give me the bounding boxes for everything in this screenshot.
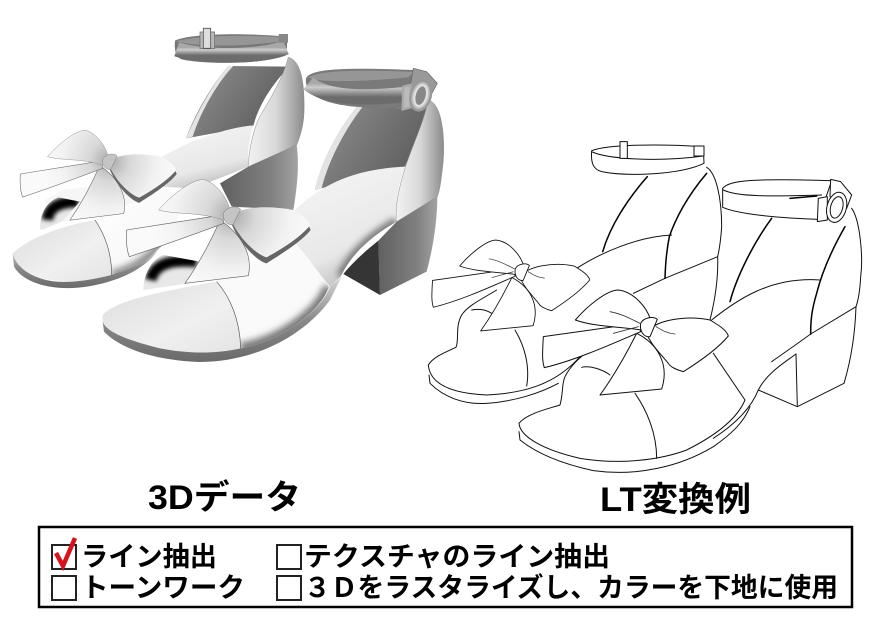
front shoe: bow	[126, 179, 311, 283]
back shoe: ankle strap	[175, 28, 288, 63]
back shoe: bow	[20, 130, 177, 220]
front shoe bow	[543, 290, 728, 395]
settings checklist panel	[39, 527, 852, 607]
unchecked box: texture line extraction: テクスチャのライン抽出	[304, 542, 610, 572]
unchecked box: tone work: トーンワーク	[81, 573, 245, 603]
front shoe: ankle strap	[306, 68, 437, 108]
3D shoes illustration	[13, 28, 444, 362]
back shoe outlines	[428, 142, 722, 404]
front shoe outlines	[519, 179, 862, 472]
heading: LT conversion example: LT変換例	[600, 481, 751, 519]
front shoe: body	[103, 100, 444, 362]
back shoe: body	[13, 57, 304, 288]
back shoe bow	[432, 240, 590, 331]
checked box: line extraction: ライン抽出	[81, 542, 217, 572]
heading: 3D data: 3Dデータ	[148, 478, 301, 517]
front shoe: buckle	[403, 79, 434, 113]
unchecked box: rasterize 3D: ３Ｄをラスタライズし、カラーを下地に使用	[304, 572, 838, 603]
line art shoes illustration	[428, 142, 862, 472]
